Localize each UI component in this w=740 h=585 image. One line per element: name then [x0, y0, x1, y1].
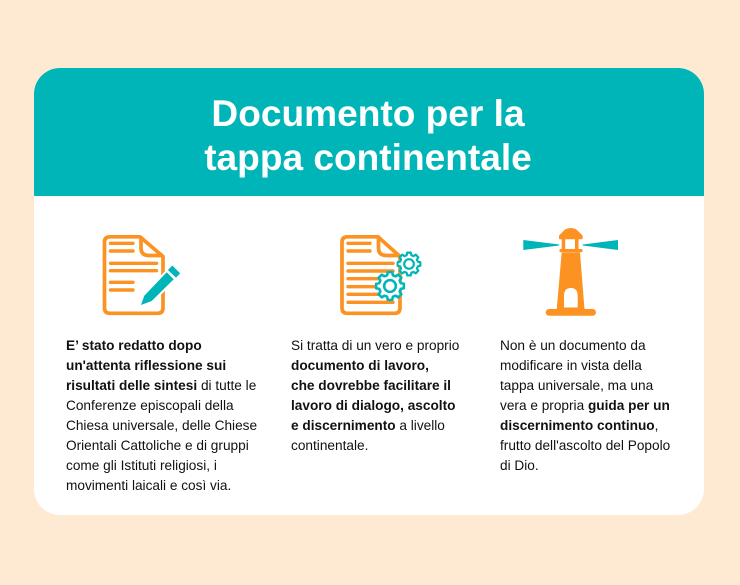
text block: column 1: Chiesa universale, delle Chiese [66, 418, 257, 433]
text block: column 3: di Dio. [500, 458, 539, 473]
text block: column 3: tappa universale, ma una [500, 378, 653, 393]
icon: document with pencil [102, 235, 180, 316]
panel: card [34, 68, 704, 515]
icon: document with gears [340, 235, 422, 316]
text block: column 1: un'attenta riflessione sui [66, 358, 226, 373]
text block: column 2: lavoro di dialogo, ascolto [291, 398, 455, 413]
text block: column 2: che dovrebbe facilitare il [291, 378, 451, 393]
text block: column 1: E’ stato redatto dopo [66, 338, 202, 353]
text block: column 2 [291, 338, 459, 453]
text block: column 2: documento di lavoro, [291, 358, 429, 373]
text block: column 2: e discernimento a livello [291, 418, 445, 433]
text block: column 1: movimenti laicali e così via. [66, 478, 231, 493]
text block: column 1: risultati delle sintesi di tutte le [66, 378, 256, 393]
title: tappa continentale [204, 136, 532, 178]
text block: column 1: Orientali Cattoliche e di gruppi [66, 438, 249, 453]
text block: column 2: continentale. [291, 438, 368, 453]
text block: column 3: Non è un documento da [500, 338, 646, 353]
icon: lighthouse [523, 228, 618, 316]
header band [34, 68, 704, 196]
text block: column 3: frutto dell'ascolto del Popolo [500, 438, 670, 453]
text block: column 2: Si tratta di un vero e proprio [291, 338, 459, 353]
title: Documento per la [211, 92, 525, 134]
title [204, 92, 532, 178]
text block: column 3: modificare in vista della [500, 358, 642, 373]
text block: column 3: vera e propria guida per un [500, 398, 670, 413]
text block: column 1 [66, 338, 257, 493]
text block: column 1: come gli Istituti religiosi, i [66, 458, 217, 473]
text block: column 3: discernimento continuo, [500, 418, 658, 433]
text block: column 3 [500, 338, 670, 473]
text block: column 1: Conferenze episcopali della [66, 398, 234, 413]
